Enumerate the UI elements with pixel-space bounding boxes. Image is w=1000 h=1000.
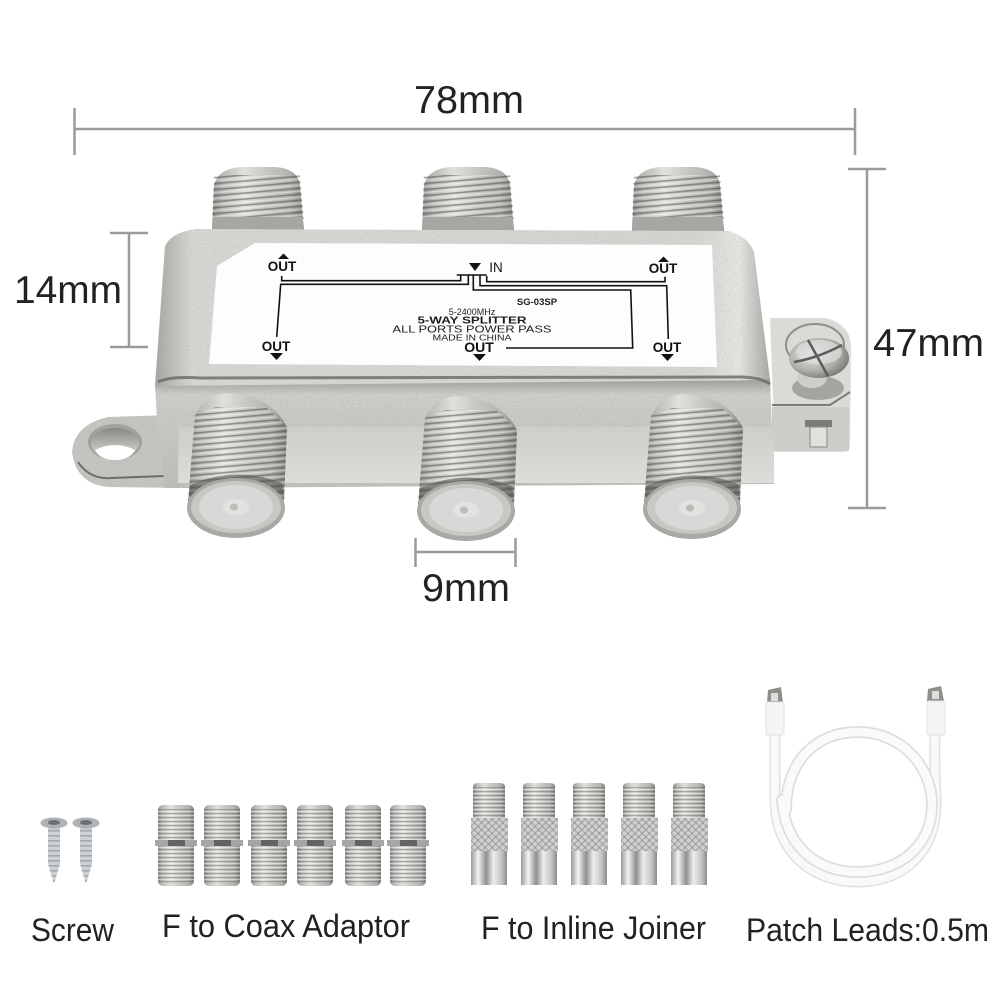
port labels: OUT [464,339,494,355]
dimension: height 14mm [14,233,148,347]
dimension: height 14mm: 14mm [14,269,122,312]
coax adaptors [155,805,429,886]
spec text: ALL PORTS POWER PASS [392,324,552,336]
left F connector [766,687,784,735]
port labels: OUT [653,340,682,355]
front connectors [187,393,743,541]
body top face [155,229,770,386]
spec text: MADE IN CHINA [432,334,512,342]
back connectors [212,167,724,231]
top face texture [172,229,757,386]
spec text [392,297,558,342]
front ridge [158,377,770,384]
patch lead cable [766,686,945,882]
spec text: 5-2400MHz [449,307,496,317]
cable strands [775,732,936,882]
white label sticker [209,243,717,367]
caption: F to Inline Joiner: F to Inline Joiner [481,910,706,946]
dimension: connector 9mm [415,538,516,610]
right F connector [927,686,945,735]
port labels [262,259,682,355]
port labels: OUT [262,339,291,354]
circuit lines [277,275,668,348]
dimension: overall width 78mm [74,79,855,155]
caption: Patch Leads: Patch Leads:0.5m [746,912,989,948]
dimension: depth 47mm [848,169,984,508]
spec text: 5-WAY SPLITTER [418,316,528,326]
port labels: IN [489,260,503,275]
spec text: SG-03SP [517,297,558,308]
caption: F to Coax Adaptor: F to Coax Adaptor [162,908,410,944]
left mounting ear [72,415,182,488]
dimension: depth 47mm: 47mm [873,322,984,365]
inline joiners [471,783,708,885]
splitter device [72,167,851,541]
dimension: overall width 78mm: 78mm [414,79,524,122]
body lower front [150,378,780,490]
screws [40,818,100,884]
port arrows [270,254,674,361]
port labels: OUT [649,261,678,276]
port labels: OUT [268,259,297,274]
right mounting ear with screw [770,318,851,452]
caption: Screw: Screw [31,912,115,948]
dimension: connector 9mm: 9mm [422,567,510,610]
